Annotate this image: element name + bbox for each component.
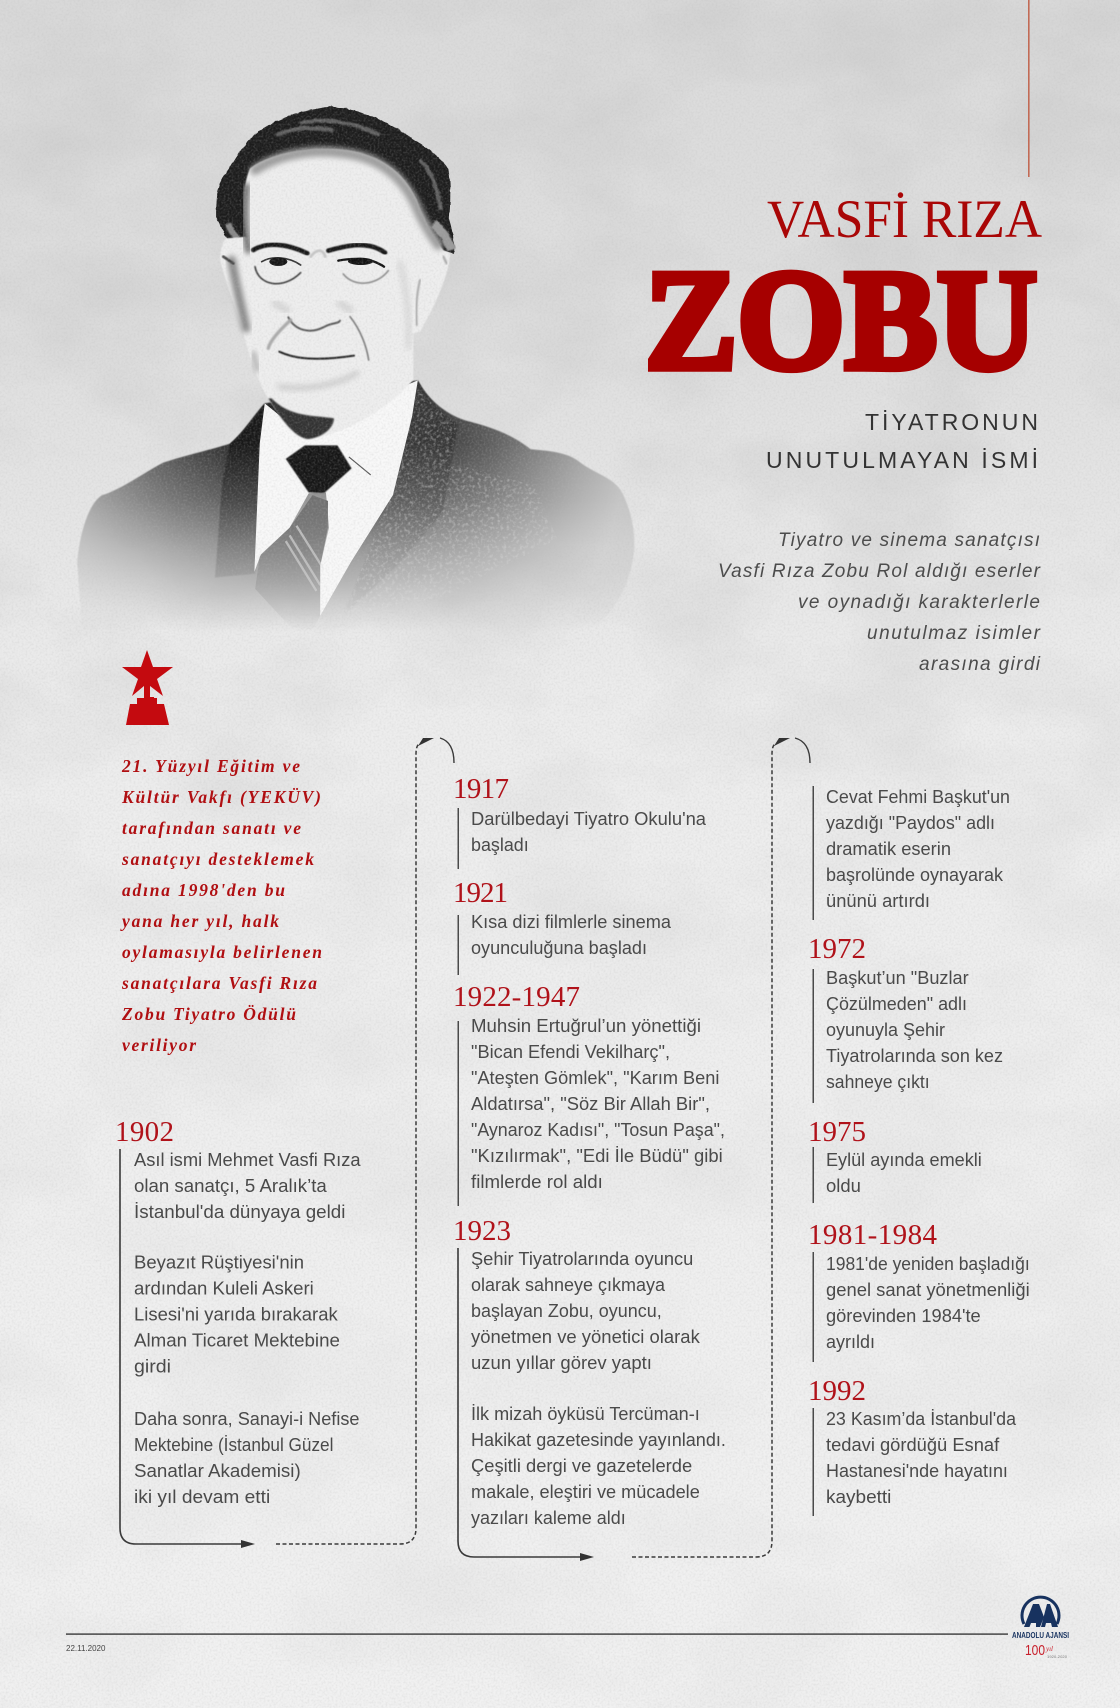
award note: Zobu Tiyatro Ödülü (121, 1004, 296, 1024)
logo: Anadolu Ajansı: ANADOLU AJANSI (1012, 1630, 1069, 1640)
subtitle: TİYATRONUN (865, 409, 1038, 435)
entry 1923: olarak sahneye çıkmaya (471, 1275, 666, 1295)
intro text: Vasfi Rıza Zobu Rol aldığı eserler (718, 561, 1041, 582)
entry: Paydos: ününü artırdı (826, 891, 930, 911)
entry 1975: Eylül ayında emekli (826, 1150, 982, 1170)
intro text: unutulmaz isimler (867, 623, 1041, 644)
text: 1902: olan sanatçı, 5 Aralık’ta (134, 1176, 328, 1196)
text: 1902: Asıl ismi Mehmet Vasfi Rıza (134, 1150, 362, 1170)
entry 1981-1984: ayrıldı (826, 1332, 875, 1352)
entry 1992: 23 Kasım’da İstanbul'da (826, 1409, 1017, 1429)
entry 1921: oyunculuğuna başladı (471, 938, 647, 958)
entry 1922-1947: Muhsin Ertuğrul’un yönettiği (471, 1016, 701, 1036)
timeline column 1 (115, 738, 454, 1548)
arrow: dashed connector to column 2 (276, 738, 454, 1544)
intro text (718, 530, 1041, 675)
logo: Anadolu Ajansı (1012, 1597, 1069, 1659)
intro text: Tiyatro ve sinema sanatçısı (778, 530, 1040, 551)
entry 1992: kaybetti (826, 1487, 891, 1507)
mouth (279, 352, 354, 359)
year 1981-1984: 1981-1984 (808, 1219, 938, 1251)
entry 1921 (458, 912, 672, 975)
necktie (255, 444, 352, 618)
footer rule (66, 1633, 1008, 1635)
text: 1902: Daha sonra, Sanayi-i Nefise (134, 1409, 360, 1429)
entry 1921: Kısa dizi filmlerle sinema (471, 912, 672, 932)
text: 1902 (134, 1150, 362, 1507)
award note: sanatçılara Vasfi Rıza (121, 973, 317, 993)
entry 1922-1947: "Ateşten Gömlek", "Karım Beni (471, 1068, 719, 1088)
award note: tarafından sanatı ve (122, 818, 301, 838)
text: 1902: Sanatlar Akademisi) (134, 1461, 301, 1481)
arrow: column 2 solid connector (458, 1248, 594, 1561)
entry 1972: Başkut’un "Buzlar (826, 968, 969, 988)
face shading (223, 152, 447, 388)
logo: Anadolu Ajansı: 1920-2020 (1047, 1654, 1068, 1659)
entry 1923: Şehir Tiyatrolarında oyuncu (471, 1249, 693, 1269)
entry 1923: yönetmen ve yönetici olarak (471, 1327, 701, 1347)
entry 1917: Darülbedayi Tiyatro Okulu'na (471, 809, 707, 829)
award note: sanatçıyı desteklemek (121, 849, 314, 869)
arrow: column 1 solid connector (120, 1149, 255, 1548)
subtitle: UNUTULMAYAN İSMİ (766, 447, 1038, 473)
entry 1992: Hastanesi'nde hayatını (826, 1461, 1008, 1481)
entry 1972: Tiyatrolarında son kez (826, 1046, 1003, 1066)
logo: Anadolu Ajansı: yıl (1045, 1645, 1053, 1653)
entry 1922-1947: filmlerde rol aldı (471, 1172, 603, 1192)
arrow: dashed connector to column 3 (632, 738, 810, 1557)
entry 1922-1947: "Aynaroz Kadısı", "Tosun Paşa", (471, 1120, 725, 1140)
year 1972: 1972 (808, 933, 866, 965)
entry 1923: makale, eleştiri ve mücadele (471, 1482, 700, 1502)
entry 1922-1947: "Kızılırmak", "Edi İle Büdü" gibi (471, 1146, 723, 1166)
entry: Paydos: Cevat Fehmi Başkut'un (826, 787, 1010, 807)
text: 1902: İstanbul'da dünyaya geldi (134, 1202, 345, 1222)
face (220, 149, 450, 440)
entry 1975 (812, 1147, 982, 1203)
year 1923: 1923 (453, 1215, 511, 1247)
entry: Paydos: başrolünde oynayarak (826, 865, 1004, 885)
entry 1922-1947 (458, 1016, 725, 1206)
entry 1923: Hakikat gazetesinde yayınlandı. (471, 1430, 726, 1450)
timeline column 3 (808, 786, 1030, 1516)
entry 1917 (458, 808, 707, 869)
text: 1902: Mektebine (İstanbul Güzel (134, 1435, 333, 1455)
text: 1902: Beyazıt Rüştiyesi'nin (134, 1252, 304, 1272)
hair (216, 107, 454, 253)
entry 1917: başladı (471, 835, 529, 855)
year 1992: 1992 (808, 1375, 866, 1407)
entry 1923: Çeşitli dergi ve gazetelerde (471, 1456, 692, 1476)
award note (120, 756, 322, 1055)
entry 1981-1984: 1981'de yeniden başladığı (826, 1254, 1030, 1274)
entry: Paydos (812, 786, 1010, 920)
entry 1923: başlayan Zobu, oyuncu, (471, 1301, 662, 1321)
text: 1902: iki yıl devam etti (134, 1487, 270, 1507)
entry 1981-1984 (812, 1252, 1030, 1362)
eyes (262, 258, 301, 265)
entry 1922-1947: "Bican Efendi Vekilharç", (471, 1042, 670, 1062)
portrait photograph (77, 107, 634, 642)
entry: Paydos: yazdığı "Paydos" adlı (826, 813, 995, 833)
vertical accent rule (1028, 0, 1030, 177)
icon: star trophy (122, 650, 173, 725)
year 1921: 1921 (453, 877, 508, 909)
title (645, 189, 1042, 399)
entry 1981-1984: görevinden 1984'te (826, 1306, 981, 1326)
award note: Kültür Vakfı (YEKÜV) (121, 787, 321, 807)
text: 1902: ardından Kuleli Askeri (134, 1278, 314, 1298)
entry 1972: oyunuyla Şehir (826, 1020, 945, 1040)
award note: oylamasıyla belirlenen (122, 942, 322, 962)
year 1975: 1975 (808, 1116, 866, 1148)
title line: first name: VASFİ RIZA (767, 189, 1042, 249)
text: 1902: Lisesi'ni yarıda bırakarak (134, 1304, 339, 1324)
nose (288, 317, 340, 331)
timeline column 2 (453, 738, 810, 1561)
entry 1992 (812, 1408, 1017, 1516)
text: 1902: Alman Ticaret Mektebine (134, 1330, 340, 1350)
entry 1923 (471, 1249, 726, 1528)
entry 1981-1984: genel sanat yönetmenliği (826, 1280, 1030, 1300)
entry 1923: uzun yıllar görev yaptı (471, 1353, 652, 1373)
intro text: ve oynadığı karakterlerle (798, 592, 1040, 613)
entry 1975: oldu (826, 1176, 861, 1196)
chin shadow (268, 398, 334, 439)
award note: adına 1998'den bu (122, 880, 285, 900)
entry 1923: yazıları kaleme aldı (471, 1508, 626, 1528)
entry 1923: İlk mizah öyküsü Tercüman-ı (471, 1404, 700, 1424)
intro text: arasına girdi (919, 654, 1041, 675)
entry: Paydos: dramatik eserin (826, 839, 951, 859)
footer date: 22.11.2020 (66, 1644, 106, 1653)
entry 1992: tedavi gördüğü Esnaf (826, 1435, 1000, 1455)
entry 1972 (812, 968, 1003, 1103)
logo: Anadolu Ajansı: 100 (1025, 1642, 1045, 1659)
entry 1972: Çözülmeden" adlı (826, 994, 967, 1014)
subtitle (766, 409, 1038, 473)
entry 1972: sahneye çıktı (826, 1072, 930, 1092)
eyebrows (253, 245, 307, 253)
entry 1922-1947: Aldatırsa", "Söz Bir Allah Bir", (471, 1094, 710, 1114)
award note: yana her yıl, halk (120, 911, 279, 931)
shirt (254, 380, 418, 616)
award note: 21. Yüzyıl Eğitim ve (121, 756, 300, 776)
year 1917: 1917 (453, 773, 509, 805)
award note: veriliyor (122, 1035, 196, 1055)
title line: surname: ZOBU (645, 241, 1037, 399)
year 1902: 1902 (115, 1116, 174, 1148)
year 1922-1947: 1922-1947 (453, 981, 580, 1013)
text: 1902: girdi (134, 1356, 171, 1376)
